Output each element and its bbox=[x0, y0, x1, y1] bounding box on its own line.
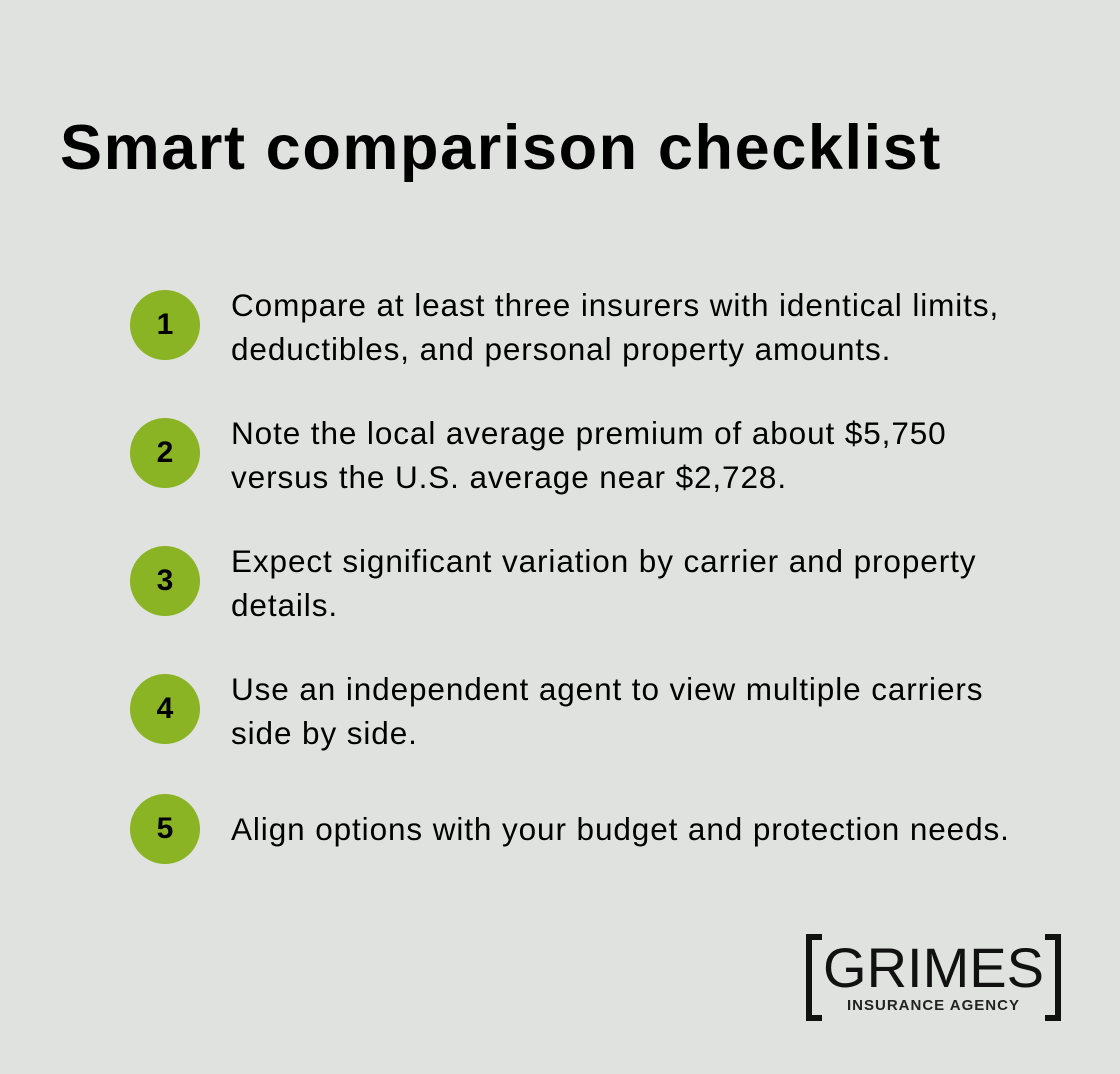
text 4: Use an independent agent to view multiple carriers bbox=[231, 671, 983, 707]
item 3 bbox=[130, 543, 976, 623]
text 4: side by side. bbox=[231, 715, 418, 751]
item 1 bbox=[130, 287, 999, 367]
title: Smart comparison checklist bbox=[60, 113, 942, 183]
number circle 5 bbox=[130, 794, 200, 864]
number circle 4: 4 bbox=[157, 692, 173, 725]
number circle 2 bbox=[130, 418, 200, 488]
text 1: deductibles, and personal property amounts. bbox=[231, 331, 891, 367]
item 5 bbox=[130, 794, 1010, 864]
text 1: Compare at least three insurers with identical limits, bbox=[231, 287, 999, 323]
logo: INSURANCE AGENCY bbox=[847, 997, 1020, 1014]
number circle 3 bbox=[130, 546, 200, 616]
logo: GRIMES bbox=[823, 936, 1044, 999]
number circle 3: 3 bbox=[157, 564, 173, 597]
number circle 1 bbox=[130, 290, 200, 360]
item 4 bbox=[130, 671, 983, 751]
text 3: details. bbox=[231, 587, 338, 623]
text 5: Align options with your budget and protection needs. bbox=[231, 811, 1010, 847]
number circle 1: 1 bbox=[157, 308, 173, 341]
text 4 bbox=[231, 671, 983, 751]
text 2: Note the local average premium of about $5,750 bbox=[231, 415, 947, 451]
text 2 bbox=[231, 415, 947, 495]
text 3: Expect significant variation by carrier and property bbox=[231, 543, 976, 579]
logo bbox=[806, 934, 1061, 1021]
number circle 5: 5 bbox=[157, 812, 173, 845]
text 1 bbox=[231, 287, 999, 367]
number circle 2: 2 bbox=[157, 436, 173, 469]
text 2: versus the U.S. average near $2,728. bbox=[231, 459, 787, 495]
text 3 bbox=[231, 543, 976, 623]
item 2 bbox=[130, 415, 947, 495]
number circle 4 bbox=[130, 674, 200, 744]
